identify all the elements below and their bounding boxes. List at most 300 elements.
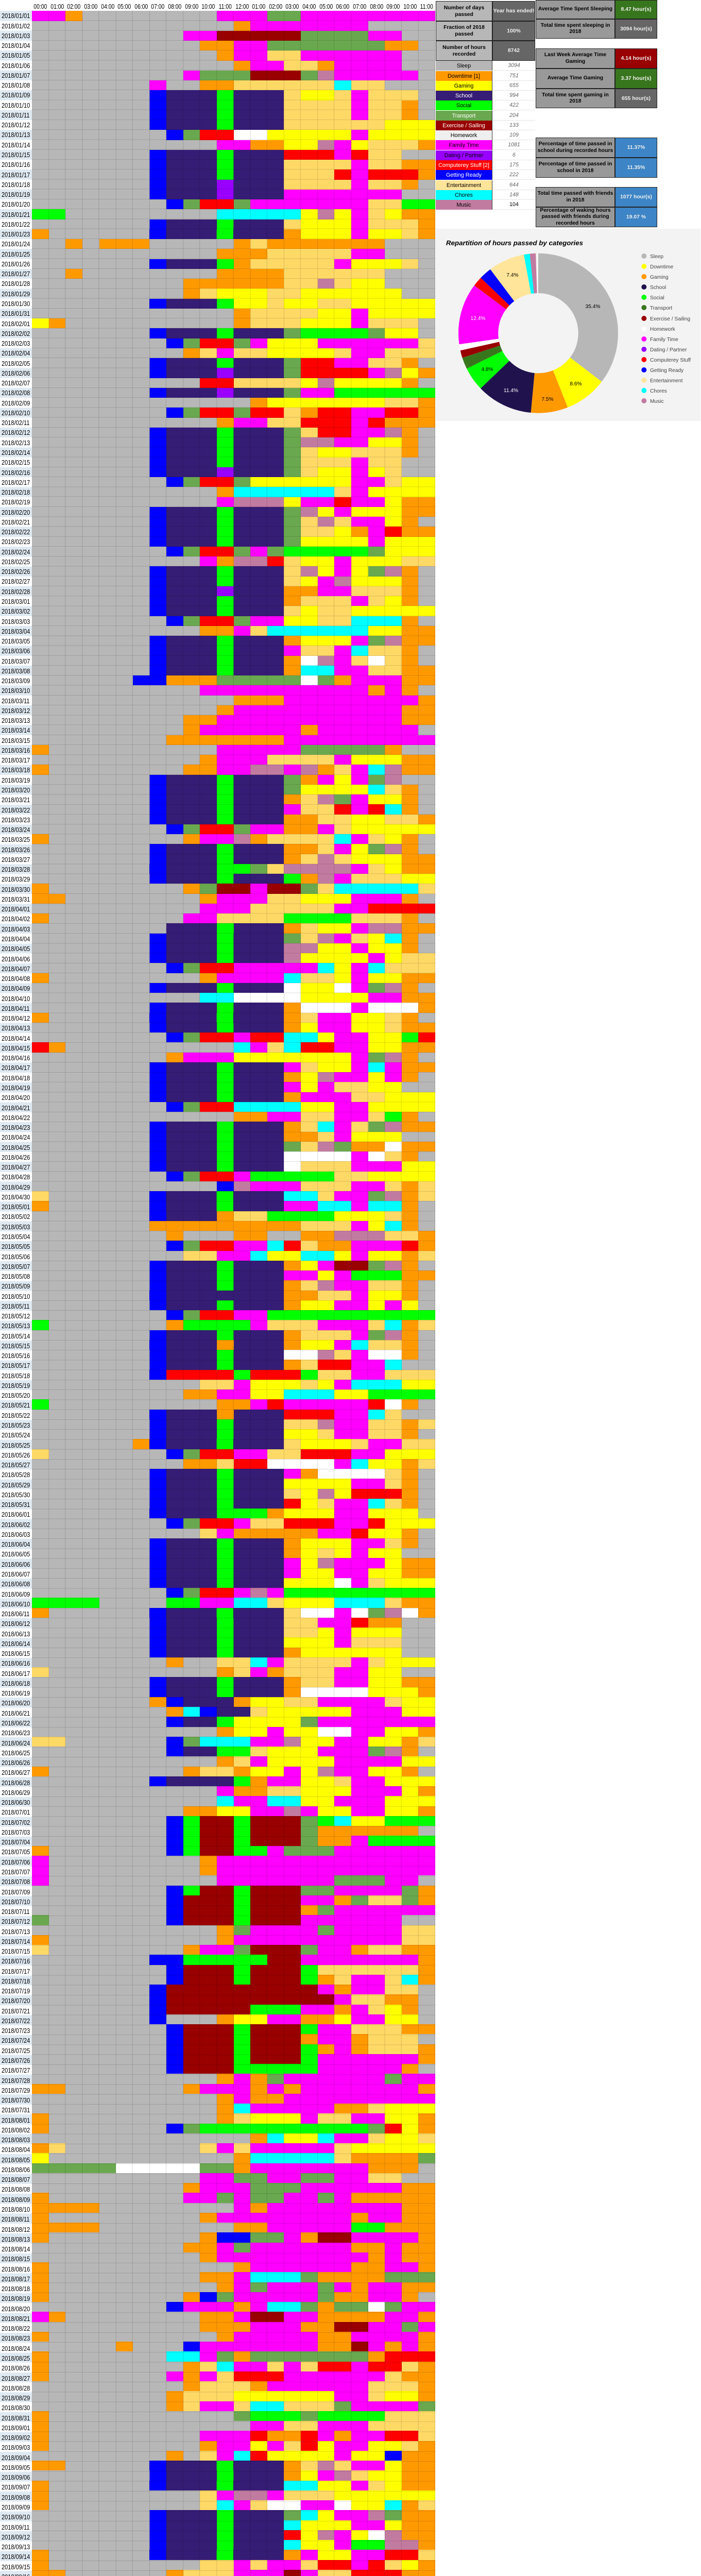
stat label: average gaming: [536, 69, 615, 89]
date labels column: 2018/06/14: [2, 1640, 30, 1648]
date labels column: 2018/04/05: [2, 945, 30, 953]
date labels column: 2018/04/02: [2, 915, 30, 923]
date labels column: 2018/01/31: [2, 310, 30, 317]
date labels column: 2018/06/18: [2, 1680, 30, 1687]
hours: Exercise: 133: [509, 122, 519, 128]
date labels column: 2018/05/12: [2, 1312, 30, 1320]
category: Exercise: [436, 121, 492, 130]
date labels column: 2018/04/22: [2, 1114, 30, 1122]
panel: school percentages: [536, 138, 657, 178]
date labels column: 2018/08/14: [2, 2245, 30, 2253]
date labels column: 2018/08/03: [2, 2136, 30, 2144]
date labels column: 2018/06/12: [2, 1620, 30, 1628]
date labels column: 2018/03/03: [2, 617, 30, 625]
date labels column: 2018/03/18: [2, 766, 30, 774]
date labels column: 2018/01/11: [2, 111, 29, 119]
date labels column: 2018/04/17: [2, 1064, 30, 1072]
stat label: total gaming: [536, 89, 615, 108]
date labels column: 2018/06/07: [2, 1570, 30, 1578]
hours: Social: [493, 100, 535, 110]
time axis header: 03:00: [84, 3, 97, 10]
hours: Getting Ready: 222: [509, 172, 519, 178]
date labels column: 2018/09/03: [2, 2444, 30, 2451]
value: fraction of year: 100%: [507, 28, 521, 34]
date labels column: 2018/01/21: [2, 211, 30, 218]
date labels column: 2018/05/21: [2, 1401, 30, 1409]
hours: Homework: 109: [509, 132, 519, 138]
date labels column: 2018/08/21: [2, 2315, 30, 2323]
date labels column: 2018/04/23: [2, 1124, 30, 1131]
date labels column: 2018/08/08: [2, 2185, 30, 2193]
date labels column: 2018/02/25: [2, 558, 30, 566]
date labels column: 2018/02/07: [2, 379, 30, 387]
hours: Computerey Stuff: 175: [509, 162, 519, 168]
date labels column: 2018/06/19: [2, 1689, 30, 1697]
stat label: average gaming: Average Time Gaming: [548, 75, 603, 81]
date labels column: 2018/03/17: [2, 756, 30, 764]
hours: Music: 104: [509, 201, 519, 208]
date labels column: 2018/07/13: [2, 1928, 30, 1936]
date labels column: 2018/04/04: [2, 935, 30, 943]
panel: donut chart card: [436, 229, 700, 421]
date labels column: 2018/03/12: [2, 707, 30, 715]
value: hours recorded: [492, 41, 535, 61]
date labels column: 2018/05/23: [2, 1421, 30, 1429]
chart legend: Exercise / Sailing: [650, 316, 690, 322]
date labels column: 2018/06/28: [2, 1779, 30, 1787]
date labels column: 2018/02/28: [2, 588, 30, 596]
date labels column: 2018/01/03: [2, 32, 30, 40]
time axis header: 07:00: [353, 3, 366, 10]
hours: Transport: 204: [509, 112, 519, 118]
date labels column: 2018/02/08: [2, 389, 30, 397]
date labels column: 2018/04/27: [2, 1163, 30, 1171]
stat value: waking hours with friends: 19.07 %: [626, 214, 646, 220]
date labels column: 2018/07/23: [2, 2027, 30, 2035]
date labels column: 2018/02/24: [2, 548, 30, 556]
date labels column: 2018/01/27: [2, 270, 30, 278]
date labels column: [0, 11, 32, 2576]
hours: Family Time: [493, 140, 535, 150]
stat label: school in 2018: [536, 158, 615, 178]
date labels column: 2018/03/28: [2, 866, 30, 873]
hours: School: 994: [509, 92, 519, 98]
date labels column: 2018/03/26: [2, 846, 30, 854]
date labels column: 2018/07/04: [2, 1838, 30, 1846]
date labels column: 2018/02/12: [2, 429, 30, 436]
heatmap: hours by day, one row per day of 2018: [32, 11, 435, 2576]
date labels column: 2018/05/07: [2, 1263, 30, 1270]
date labels column: 2018/08/10: [2, 2206, 30, 2213]
date labels column: 2018/05/22: [2, 1412, 30, 1419]
date labels column: 2018/01/19: [2, 191, 30, 198]
hours: Gaming: 655: [509, 82, 519, 89]
time axis header: 08:00: [370, 3, 383, 10]
date labels column: 2018/07/14: [2, 1938, 30, 1945]
date labels column: 2018/05/13: [2, 1322, 30, 1330]
category: Computerey Stuff: Computerey Stuff [2]: [438, 162, 489, 168]
date labels column: 2018/03/23: [2, 816, 30, 824]
date labels column: 2018/05/14: [2, 1332, 30, 1340]
date labels column: 2018/09/09: [2, 2503, 30, 2511]
chart legend: School: [650, 285, 666, 291]
stat value: time with friends: 1077 hour(s): [620, 194, 652, 200]
counter: hours recorded: [436, 41, 492, 61]
date labels column: 2018/03/30: [2, 886, 30, 893]
stat value: average gaming: 3.37 hour(s): [621, 76, 651, 81]
date labels column: 2018/02/03: [2, 340, 30, 347]
date labels column: 2018/01/29: [2, 290, 30, 298]
date labels column: 2018/02/05: [2, 360, 30, 367]
date labels column: 2018/08/05: [2, 2156, 30, 2164]
date labels column: 2018/06/26: [2, 1759, 30, 1767]
date labels column: 2018/04/10: [2, 995, 30, 1003]
date labels column: 2018/04/18: [2, 1074, 30, 1082]
time axis header: 05:00: [319, 3, 333, 10]
date labels column: 2018/02/22: [2, 528, 30, 536]
time axis header: 07:00: [151, 3, 165, 10]
chart legend: Chores: [650, 388, 667, 394]
date labels column: 2018/08/31: [2, 2414, 30, 2422]
date labels column: 2018/09/15: [2, 2563, 30, 2571]
date labels column: 2018/07/19: [2, 1987, 30, 1995]
date labels column: 2018/07/15: [2, 1947, 30, 1955]
counter: days passed: [436, 1, 492, 21]
date labels column: 2018/01/05: [2, 52, 30, 59]
date labels column: 2018/08/24: [2, 2345, 30, 2352]
date labels column: 2018/07/01: [2, 1808, 30, 1816]
date labels column: 2018/06/11: [2, 1610, 29, 1618]
date labels column: 2018/06/27: [2, 1769, 30, 1776]
stat label: total sleep: Total time spent sleeping in 2018: [541, 23, 610, 35]
date labels column: 2018/03/06: [2, 647, 30, 655]
date labels column: 2018/01/18: [2, 181, 30, 189]
date labels column: 2018/03/19: [2, 776, 30, 784]
chart legend: Family Time: [650, 337, 678, 343]
date labels column: 2018/05/05: [2, 1243, 30, 1250]
date labels column: 2018/06/21: [2, 1709, 30, 1717]
date labels column: 2018/02/18: [2, 488, 30, 496]
category: Music: Music: [456, 202, 471, 208]
time axis header: 02:00: [67, 3, 81, 10]
date labels column: 2018/01/10: [2, 101, 30, 109]
date labels column: 2018/09/13: [2, 2543, 30, 2551]
time axis header: 01:00: [50, 3, 64, 10]
stat value: total sleep: 3094 hour(s): [620, 26, 652, 32]
date labels column: 2018/02/26: [2, 568, 30, 575]
time axis header: 01:00: [252, 3, 265, 10]
time axis header: 11:00: [420, 3, 433, 10]
chart legend: Dating / Partner: [650, 347, 687, 353]
date labels column: 2018/05/16: [2, 1352, 30, 1360]
hours: Gaming: [493, 81, 535, 91]
panel: gaming stats: [536, 48, 657, 108]
date labels column: 2018/06/24: [2, 1739, 30, 1747]
date labels column: 2018/05/08: [2, 1273, 30, 1280]
date labels column: 2018/05/24: [2, 1431, 30, 1439]
date labels column: 2018/06/23: [2, 1729, 30, 1737]
date labels column: 2018/07/11: [2, 1908, 29, 1916]
stat label: school during recorded hours: Percentage of time passed in school during recorded hours: [538, 141, 613, 154]
date labels column: 2018/05/20: [2, 1392, 30, 1399]
date labels column: 2018/01/24: [2, 240, 30, 248]
date labels column: 2018/07/28: [2, 2077, 30, 2084]
date labels column: 2018/05/11: [2, 1302, 29, 1310]
date labels column: 2018/01/04: [2, 42, 30, 49]
date labels column: 2018/08/17: [2, 2275, 30, 2283]
stat value: total sleep: [615, 19, 657, 39]
date labels column: 2018/02/14: [2, 449, 30, 456]
category: Dating: Dating / Partner: [444, 152, 483, 159]
category: Computerey Stuff: [436, 160, 492, 170]
date labels column: 2018/03/10: [2, 687, 30, 694]
time axis header: 12:00: [235, 3, 249, 10]
date labels column: 2018/03/08: [2, 667, 30, 675]
date labels column: 2018/07/29: [2, 2087, 30, 2094]
date labels column: 2018/09/12: [2, 2533, 30, 2541]
date labels column: 2018/01/09: [2, 91, 30, 99]
date labels column: 2018/02/17: [2, 479, 30, 486]
slice percentage labels: 8.6%: [570, 381, 582, 387]
slice percentage labels: 7.5%: [541, 397, 554, 402]
date labels column: 2018/04/06: [2, 955, 30, 963]
date labels column: 2018/06/02: [2, 1521, 30, 1529]
category: Chores: [436, 190, 492, 200]
date labels column: 2018/08/02: [2, 2126, 30, 2134]
date labels column: 2018/08/25: [2, 2354, 30, 2362]
date labels column: 2018/04/16: [2, 1054, 30, 1062]
date labels column: 2018/05/18: [2, 1372, 30, 1380]
category: Sleep: [436, 61, 492, 71]
date labels column: 2018/01/02: [2, 22, 30, 30]
date labels column: 2018/06/25: [2, 1749, 30, 1757]
date labels column: 2018/07/10: [2, 1898, 30, 1906]
hours: Homework: [493, 130, 535, 140]
hours: Social: 422: [509, 102, 519, 108]
time axis header: 04:00: [302, 3, 316, 10]
category: Social: [436, 100, 492, 110]
date labels column: 2018/04/01: [2, 905, 30, 913]
date labels column: 2018/04/07: [2, 965, 30, 973]
date labels column: 2018/08/19: [2, 2295, 30, 2302]
date labels column: 2018/07/21: [2, 2007, 30, 2015]
hours: Downtime: [493, 71, 535, 81]
stat value: last week gaming: [615, 48, 657, 69]
date labels column: 2018/02/10: [2, 409, 30, 417]
date labels column: 2018/01/14: [2, 141, 30, 149]
date labels column: 2018/04/26: [2, 1154, 30, 1161]
date labels column: 2018/03/21: [2, 796, 30, 804]
date labels column: 2018/03/05: [2, 637, 30, 645]
date labels column: 2018/04/12: [2, 1014, 30, 1022]
date labels column: 2018/06/03: [2, 1531, 30, 1538]
date labels column: 2018/06/09: [2, 1590, 30, 1598]
date labels column: 2018/01/22: [2, 221, 30, 228]
date labels column: 2018/05/03: [2, 1223, 30, 1231]
date labels column: 2018/09/07: [2, 2483, 30, 2491]
stat value: school in 2018: [615, 158, 657, 178]
chart legend: Getting Ready: [650, 368, 684, 374]
date labels column: 2018/08/23: [2, 2334, 30, 2342]
hours: Entertainment: [493, 180, 535, 190]
time axis header: 08:00: [168, 3, 181, 10]
time axis header: 04:00: [101, 3, 114, 10]
stat label: total gaming: Total time spent gaming in 2018: [542, 92, 609, 104]
category: Entertainment: Entertainment: [447, 182, 481, 189]
category: Sleep: Sleep: [457, 63, 471, 69]
date labels column: 2018/06/13: [2, 1630, 30, 1638]
date labels column: 2018/01/15: [2, 151, 30, 159]
date labels column: 2018/06/10: [2, 1600, 30, 1608]
date labels column: 2018/03/22: [2, 806, 30, 814]
date labels column: 2018/03/29: [2, 875, 30, 883]
counter: fraction of year: [436, 21, 492, 41]
value: hours recorded: 8742: [508, 48, 520, 54]
slice percentage labels: 12.4%: [471, 316, 485, 321]
date labels column: 2018/07/16: [2, 1957, 30, 1965]
date labels column: 2018/02/04: [2, 349, 30, 357]
date labels column: 2018/08/01: [2, 2116, 30, 2124]
date labels column: 2018/07/18: [2, 1977, 30, 1985]
date labels column: 2018/07/08: [2, 1878, 30, 1886]
category: Exercise: Exercise / Sailing: [442, 123, 485, 129]
date labels column: 2018/01/06: [2, 62, 30, 70]
category: Downtime: Downtime [1]: [448, 73, 480, 79]
stat label: school in 2018: Percentage of time passed in school in 2018: [539, 161, 612, 173]
counter: fraction of year: Fraction of 2018 passed: [443, 25, 485, 37]
date labels column: 2018/01/01: [2, 12, 30, 20]
time axis header: 06:00: [336, 3, 350, 10]
date labels column: 2018/08/07: [2, 2176, 30, 2183]
category: Family Time: Family Time: [449, 142, 479, 148]
date labels column: 2018/08/22: [2, 2325, 30, 2332]
date labels column: 2018/05/17: [2, 1362, 30, 1369]
date labels column: 2018/05/29: [2, 1481, 30, 1489]
date labels column: 2018/05/31: [2, 1501, 30, 1509]
panel: sleep stats: [536, 0, 657, 39]
date labels column: 2018/07/30: [2, 2096, 30, 2104]
chart legend: [641, 253, 691, 404]
date labels column: 2018/08/29: [2, 2394, 30, 2402]
date labels column: 2018/01/26: [2, 260, 30, 268]
hours: Computerey Stuff: [493, 160, 535, 170]
date labels column: 2018/05/28: [2, 1471, 30, 1479]
hours: Entertainment: 644: [509, 182, 519, 188]
date labels column: 2018/01/23: [2, 230, 30, 238]
date labels column: 2018/07/05: [2, 1848, 30, 1856]
date labels column: 2018/01/17: [2, 171, 30, 179]
date labels column: 2018/08/16: [2, 2265, 30, 2273]
date labels column: 2018/01/07: [2, 72, 30, 79]
time axis header: [33, 3, 433, 10]
chart legend: Homework: [650, 327, 676, 332]
date labels column: 2018/05/19: [2, 1382, 30, 1389]
date labels column: 2018/04/21: [2, 1104, 30, 1112]
stat label: average sleep: Average Time Spent Sleeping: [538, 6, 612, 12]
date labels column: 2018/01/20: [2, 200, 30, 208]
stat label: last week gaming: [536, 48, 615, 69]
date labels column: 2018/04/30: [2, 1193, 30, 1201]
category: School: [436, 91, 492, 100]
stat value: school in 2018: 11.35%: [627, 165, 645, 171]
value: days passed: [492, 1, 535, 21]
date labels column: 2018/02/19: [2, 498, 30, 506]
date labels column: 2018/02/09: [2, 399, 30, 407]
stat label: average sleep: [536, 0, 615, 19]
category: Dating: [436, 150, 492, 160]
date labels column: 2018/08/30: [2, 2404, 30, 2412]
time axis header: 02:00: [269, 3, 282, 10]
time axis header: 00:00: [33, 3, 47, 10]
date labels column: 2018/05/30: [2, 1491, 30, 1499]
category: Downtime: [436, 71, 492, 81]
time axis header: 03:00: [286, 3, 299, 10]
date labels column: 2018/08/09: [2, 2196, 30, 2204]
date labels column: 2018/06/29: [2, 1789, 30, 1797]
slice percentage labels: [471, 273, 600, 402]
date labels column: 2018/07/09: [2, 1888, 30, 1896]
date labels column: 2018/03/01: [2, 598, 30, 605]
date labels column: 2018/03/02: [2, 607, 30, 615]
category: Chores: Chores: [455, 192, 473, 198]
date labels column: 2018/08/15: [2, 2255, 30, 2263]
hours: Downtime: 751: [509, 73, 519, 79]
date labels column: 2018/07/22: [2, 2017, 30, 2025]
date labels column: 2018/04/14: [2, 1035, 30, 1042]
value: fraction of year: [492, 21, 535, 41]
date labels column: 2018/03/24: [2, 826, 30, 834]
stat label: time with friends: [536, 187, 615, 207]
category: Homework: Homework: [451, 132, 477, 139]
date labels column: 2018/07/07: [2, 1868, 30, 1876]
chart legend: Downtime: [650, 264, 674, 270]
date labels column: 2018/05/15: [2, 1342, 30, 1350]
date labels column: 2018/03/07: [2, 657, 30, 665]
date labels column: 2018/08/18: [2, 2285, 30, 2293]
date labels column: 2018/05/26: [2, 1451, 30, 1459]
time axis header: 05:00: [117, 3, 131, 10]
time axis header: 09:00: [185, 3, 198, 10]
time axis header: 10:00: [403, 3, 417, 10]
category: Gaming: Gaming: [454, 83, 473, 89]
date labels column: 2018/02/06: [2, 369, 30, 377]
date labels column: 2018/05/04: [2, 1233, 30, 1241]
date labels column: 2018/02/20: [2, 509, 30, 516]
date labels column: 2018/09/05: [2, 2464, 30, 2471]
date labels column: 2018/08/13: [2, 2235, 30, 2243]
stat value: average sleep: 8.47 hour(s): [621, 7, 651, 12]
category: Transport: [436, 111, 492, 121]
stat value: total gaming: 655 hour(s): [622, 96, 651, 101]
date labels column: 2018/03/09: [2, 677, 30, 685]
date labels column: 2018/08/28: [2, 2384, 30, 2392]
date labels column: 2018/05/10: [2, 1293, 30, 1300]
category: Gaming: [436, 81, 492, 91]
date labels column: 2018/01/13: [2, 131, 30, 139]
donut chart: [478, 273, 598, 393]
date labels column: 2018/02/21: [2, 518, 30, 526]
time axis header: 06:00: [134, 3, 148, 10]
chart legend: Entertainment: [650, 378, 683, 384]
hours: Sleep: 3094: [508, 62, 520, 69]
hours: Transport: [493, 111, 535, 121]
date labels column: 2018/04/19: [2, 1084, 30, 1092]
value: days passed: Year has ended!: [493, 8, 534, 14]
date labels column: 2018/04/15: [2, 1044, 30, 1052]
date labels column: 2018/06/06: [2, 1561, 30, 1568]
hours: Getting Ready: [493, 170, 535, 180]
date labels column: 2018/05/06: [2, 1253, 30, 1260]
